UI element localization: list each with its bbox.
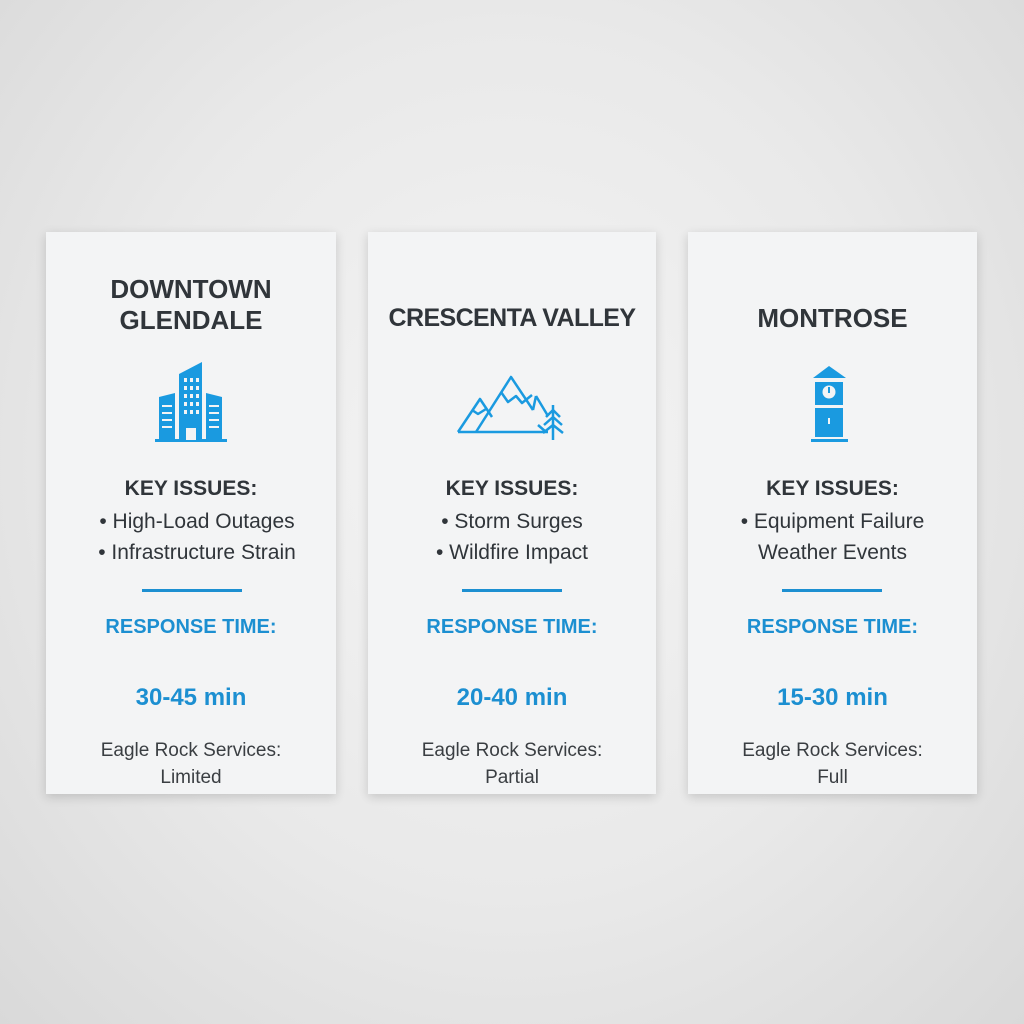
panel: Montrose: • Equipment Failure <box>741 510 924 533</box>
panel: Crescenta Valley: • Wildfire Impact <box>436 541 588 564</box>
key issues: KEY ISSUES: <box>446 477 578 500</box>
panel: Downtown Glendale: • Infrastructure Strain <box>98 541 296 564</box>
icon: building <box>155 362 227 442</box>
title: GLENDALE <box>120 305 262 335</box>
title: CRESCENTA VALLEY <box>389 304 635 332</box>
panel: Crescenta Valley: Partial <box>485 767 539 788</box>
panel: Crescenta Valley <box>368 232 656 794</box>
panel: Montrose <box>688 232 977 794</box>
panel: Montrose: Weather Events <box>758 541 907 564</box>
key issues: KEY ISSUES: <box>125 477 257 500</box>
panel: Montrose: 15-30 min <box>777 684 888 711</box>
response time: RESPONSE TIME: <box>426 616 598 638</box>
title: MONTROSE <box>757 303 908 333</box>
panel: Downtown Glendale: • High-Load Outages <box>99 510 295 533</box>
services: Eagle Rock Services: <box>742 740 923 761</box>
icon: mountains <box>457 376 564 440</box>
panel: Crescenta Valley: 20-40 min <box>457 684 567 711</box>
response time: RESPONSE TIME: <box>105 616 277 638</box>
response time: RESPONSE TIME: <box>747 616 918 638</box>
icon: clock tower <box>811 366 848 442</box>
title: DOWNTOWN <box>110 274 272 304</box>
services: Eagle Rock Services: <box>101 740 281 761</box>
key issues: KEY ISSUES: <box>766 477 899 500</box>
panel: Montrose: Full <box>817 767 848 788</box>
panel: Downtown Glendale <box>46 232 336 794</box>
panel: Downtown Glendale: Limited <box>160 767 222 788</box>
title <box>110 274 272 335</box>
services: Eagle Rock Services: <box>422 740 602 761</box>
panel: Crescenta Valley: • Storm Surges <box>441 510 583 533</box>
panel: Downtown Glendale: 30-45 min <box>136 684 246 711</box>
